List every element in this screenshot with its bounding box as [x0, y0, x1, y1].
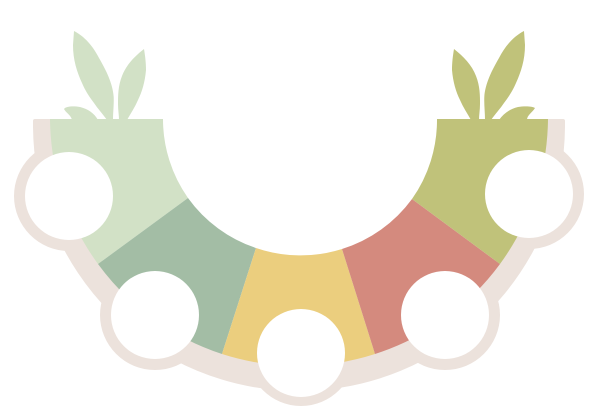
beige backing band — [14, 119, 584, 406]
segment: sage green — [98, 198, 256, 354]
leaves: right plant — [452, 31, 535, 120]
circle placeholder 2 — [111, 271, 199, 359]
segment: olive — [412, 119, 548, 264]
segment: coral — [342, 199, 500, 354]
circle placeholder 4 — [401, 271, 489, 359]
circle placeholder 3 — [257, 309, 345, 397]
circle placeholder 5 — [485, 150, 573, 238]
segment: yellow — [222, 248, 375, 366]
segment: light green — [50, 119, 188, 264]
leaves: left plant — [64, 31, 146, 120]
circle placeholder 1 — [25, 152, 113, 240]
